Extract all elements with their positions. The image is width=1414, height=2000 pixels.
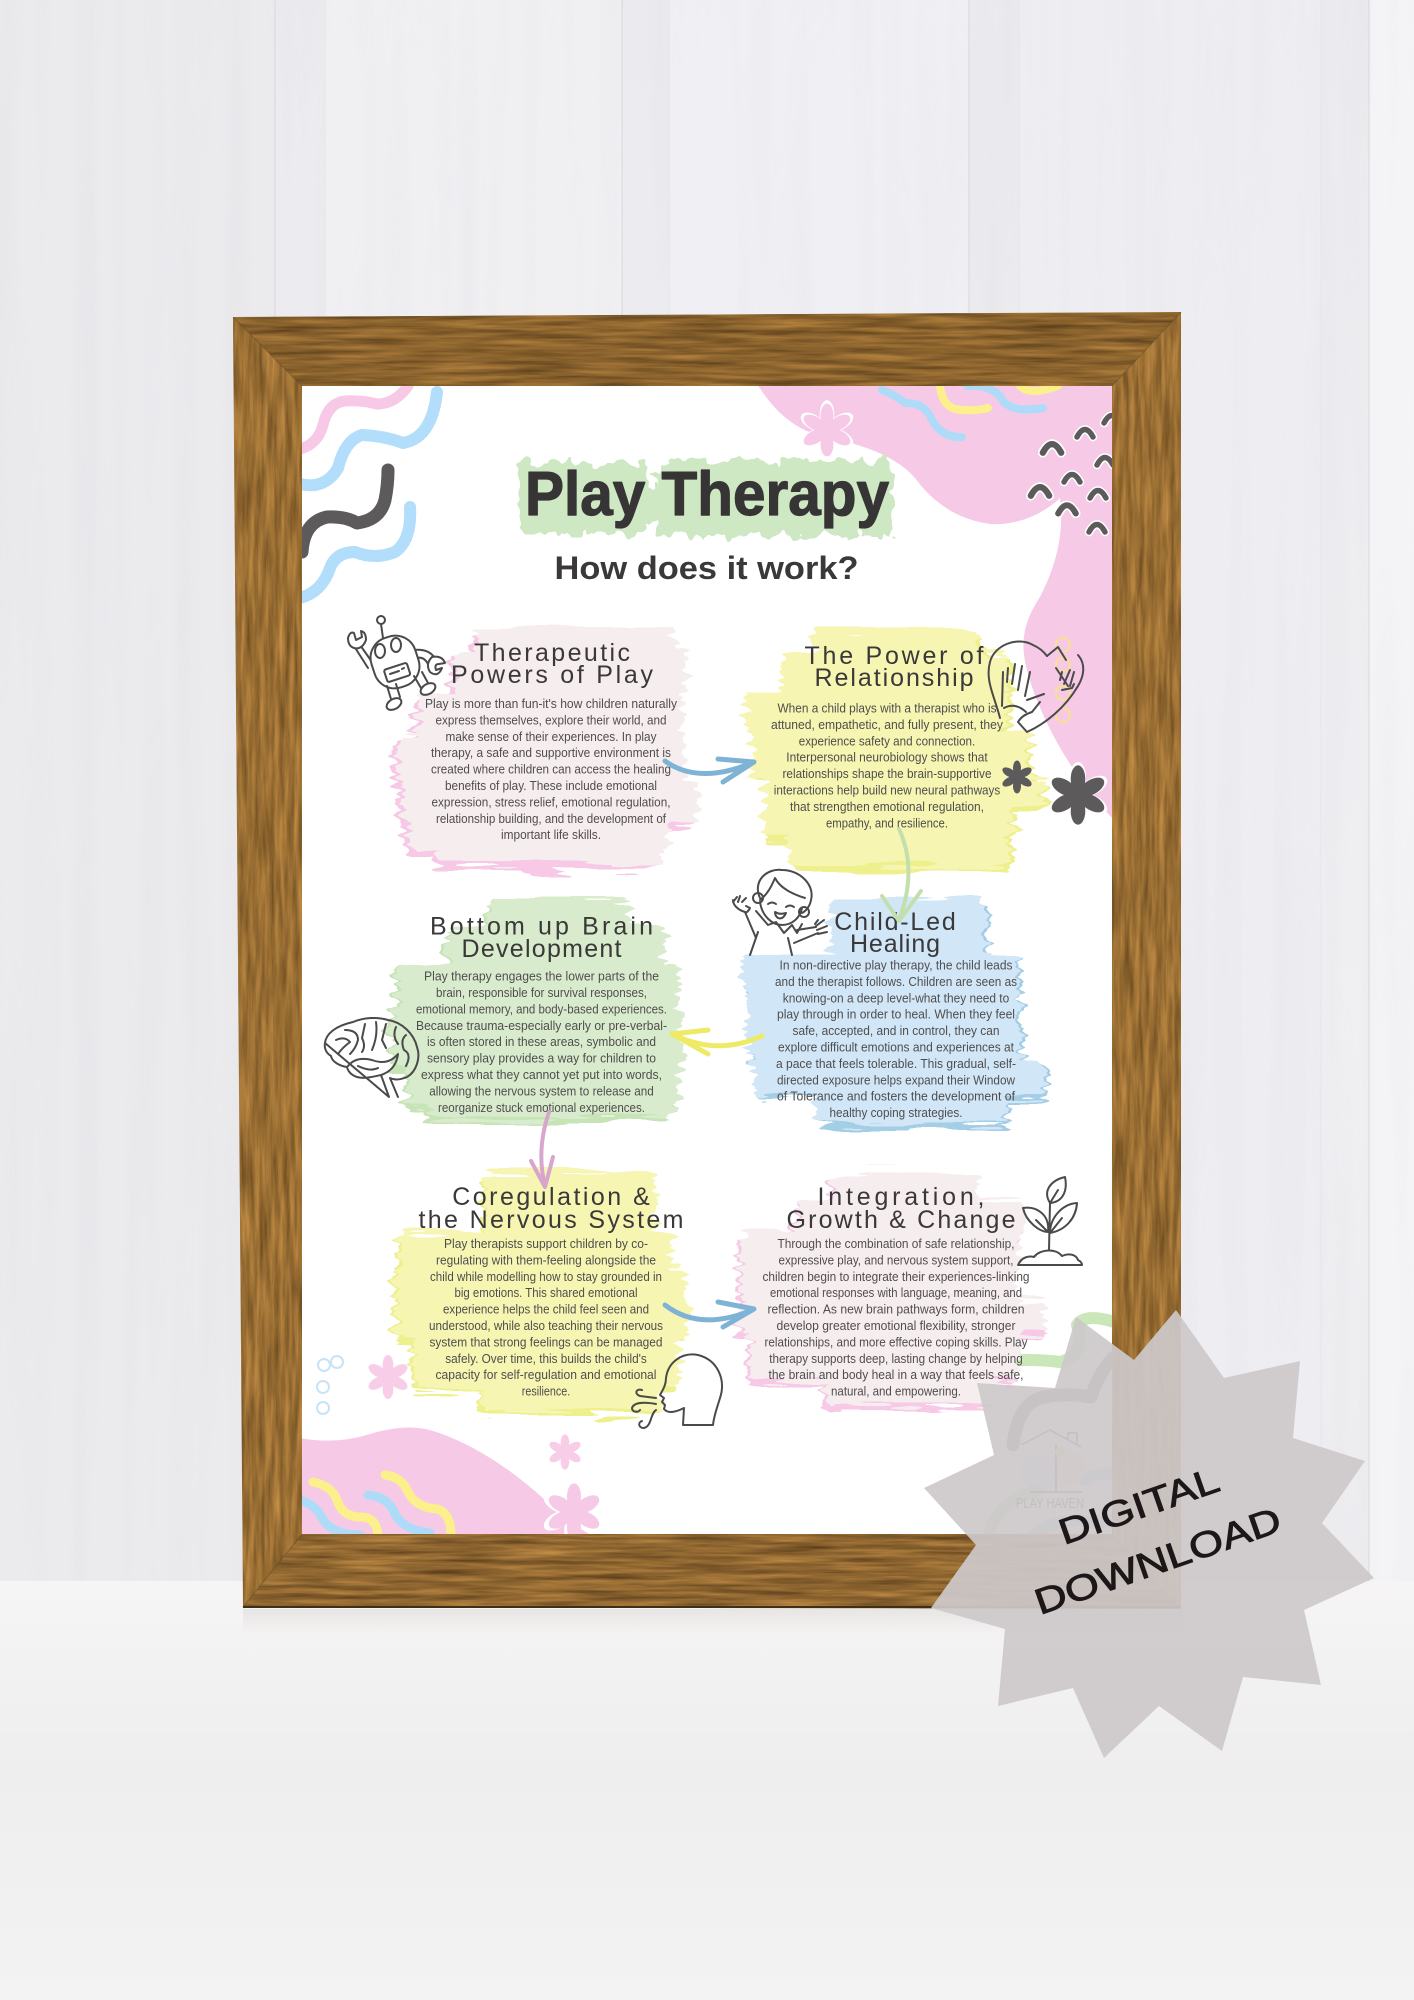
- body text: and the therapist follows. Children are seen as: [775, 975, 1017, 989]
- panel: The Power of Relationship: [745, 628, 1111, 872]
- heading: Bottom up Brain: [430, 912, 653, 940]
- icon: robot: [348, 616, 445, 712]
- brush background: yellow: [393, 1172, 686, 1416]
- heading: [786, 1183, 1016, 1234]
- body text: healthy coping strategies.: [830, 1106, 962, 1120]
- panel: Therapeutic Powers of Play: [348, 616, 699, 870]
- body text: expression, stress relief, emotional regulation,: [432, 795, 670, 809]
- heading: Child-Led: [834, 908, 956, 936]
- body text: knowing-on a deep level-what they need to: [783, 991, 1009, 1005]
- body text: express what they cannot yet put into words,: [421, 1068, 662, 1082]
- body text: child while modelling how to stay grounded in: [430, 1270, 662, 1284]
- heading: Coregulation &: [452, 1183, 650, 1211]
- heading: Development: [462, 935, 622, 963]
- body text: therapy, a safe and supportive environment is: [431, 746, 671, 760]
- logo: Play Haven watermark: PLAY HAVEN: [1016, 1495, 1084, 1512]
- body text: [762, 1237, 1030, 1399]
- body text: directed exposure helps expand their Window: [777, 1073, 1016, 1087]
- icon: sprouting plant: [1018, 1177, 1082, 1265]
- panel: Bottom up Brain Development: [325, 899, 684, 1123]
- body text: experience helps the child feel seen and: [443, 1303, 649, 1317]
- body text: reflection. As new brain pathways form, children: [768, 1303, 1024, 1317]
- body text: resilience.: [522, 1385, 570, 1399]
- body text: safely. Over time, this builds the child's: [445, 1352, 647, 1366]
- heading: Healing: [850, 930, 940, 958]
- body text: important life skills.: [501, 828, 601, 842]
- body text: safe, accepted, and in control, they can: [792, 1024, 1000, 1038]
- body text: emotional memory, and body-based experiences.: [416, 1002, 667, 1016]
- body text: Through the combination of safe relationship,: [778, 1237, 1014, 1251]
- body text: understood, while also teaching their nervous: [429, 1319, 663, 1333]
- background: white table surface: [0, 1581, 1414, 2000]
- icon: heart with hands: [989, 638, 1083, 732]
- badge: Digital Download starburst: DOWNLOAD: [1029, 1499, 1286, 1623]
- heading: [418, 1183, 684, 1234]
- arrow: yellow, Child-Led Healing to Bottom up Brain: [672, 1030, 762, 1054]
- chevrons: grey pattern: [1031, 416, 1120, 532]
- arrow: pink, Bottom up Brain to Coregulation: [531, 1112, 553, 1187]
- body text: allowing the nervous system to release and: [429, 1084, 654, 1098]
- brush background: green: [389, 899, 684, 1123]
- body text: empathy, and resilience.: [826, 816, 948, 830]
- body text: natural, and empowering.: [831, 1385, 961, 1399]
- heading: Integration,: [818, 1183, 984, 1211]
- body text: brain, responsible for survival responses,: [436, 986, 647, 1000]
- arrow: blue, Therapeutic Powers to Power of Relationship: [665, 759, 754, 782]
- body text: Because trauma-especially early or pre-verbal-: [416, 1019, 667, 1033]
- squiggles: bottom left blob: [300, 1475, 451, 1538]
- subtitle: How does it work?: How does it work?: [554, 550, 858, 586]
- icon: waving child: [733, 870, 827, 955]
- body text: [771, 702, 1004, 830]
- heading: Growth & Change: [786, 1206, 1016, 1234]
- body text: In non-directive play therapy, the child leads: [780, 958, 1012, 972]
- squiggles: top right blob: [882, 386, 1058, 437]
- body text: [416, 970, 667, 1115]
- squiggles: bottom right under badge: [1006, 1312, 1112, 1452]
- body text: system that strong feelings can be managed: [430, 1335, 662, 1349]
- panel: Integration, Growth and Change: [735, 1172, 1082, 1411]
- body text: express themselves, explore their world, and: [436, 713, 666, 727]
- flowers and rings: bottom left: [317, 1355, 604, 1544]
- brush background: pink: [735, 1172, 1046, 1411]
- heading: [451, 639, 654, 689]
- badge: Digital Download starburst: [924, 1310, 1374, 1758]
- brush background: pink: [393, 628, 699, 870]
- body text: expressive play, and nervous system support,: [778, 1253, 1014, 1267]
- panel: Coregulation and the Nervous System: [393, 1172, 722, 1428]
- poster paper: [302, 386, 1112, 1534]
- wooden picture frame: [233, 312, 1183, 1610]
- badge: Digital Download starburst: DIGITAL: [1053, 1459, 1224, 1553]
- body text: reorganize stuck emotional experiences.: [438, 1101, 645, 1115]
- heading: [804, 642, 984, 692]
- poster decorations: [300, 384, 1120, 1544]
- body text: children begin to integrate their experiences-linking: [762, 1270, 1030, 1284]
- body text: [429, 1237, 663, 1399]
- body text: a pace that feels tolerable. This gradual, self-: [776, 1057, 1016, 1071]
- body text: relationship building, and the development of: [436, 812, 666, 826]
- body text: attuned, empathetic, and fully present, they: [771, 718, 1004, 732]
- body text: Interpersonal neurobiology shows that: [786, 751, 988, 765]
- icon: brain: [325, 1018, 418, 1097]
- heading: Powers of Play: [451, 661, 654, 689]
- body text: therapy supports deep, lasting change by helping: [769, 1352, 1023, 1366]
- body text: Play therapists support children by co-: [444, 1237, 648, 1251]
- body text: benefits of play. These include emotional: [445, 779, 657, 793]
- body text: sensory play provides a way for children to: [427, 1052, 656, 1066]
- body text: that strengthen emotional regulation,: [790, 800, 984, 814]
- icon: head breathing out: [632, 1354, 722, 1428]
- body text: emotional responses with language, meaning, and: [770, 1286, 1022, 1300]
- body text: of Tolerance and fosters the development of: [777, 1090, 1015, 1104]
- title: Play Therapy on torn green patch: Play Therapy: [525, 460, 889, 529]
- icons: grey asterisks: [1001, 760, 1111, 828]
- body text: explore difficult emotions and experiences at: [778, 1040, 1014, 1054]
- body text: make sense of their experiences. In play: [446, 730, 657, 744]
- body text: interactions help build new neural pathways: [774, 784, 1000, 798]
- background: white wood plank wall: [0, 0, 1414, 1582]
- pink blob: top right: [757, 384, 1114, 820]
- heading: The Power of: [804, 642, 984, 670]
- heading: [430, 912, 653, 963]
- heading: Therapeutic: [474, 639, 630, 667]
- body text: relationships, and more effective coping skills. Play: [764, 1335, 1028, 1349]
- panel: Child-Led Healing: [733, 870, 1048, 1128]
- body text: Play is more than fun-it's how children naturally: [425, 697, 678, 711]
- logo: Play Haven watermark: [1016, 1430, 1086, 1512]
- body text: Play therapy engages the lower parts of the: [424, 970, 659, 984]
- arrow: blue, Coregulation to Integration: [665, 1302, 754, 1327]
- heading: [834, 908, 956, 958]
- body text: develop greater emotional flexibility, stronger: [776, 1319, 1016, 1333]
- brush background: yellow: [745, 628, 1049, 872]
- brush background: blue: [742, 899, 1048, 1128]
- body text: play through in order to heal. When they feel: [777, 1008, 1015, 1022]
- body text: the brain and body heal in a way that feels safe,: [768, 1368, 1024, 1382]
- body text: relationships shape the brain-supportive: [782, 767, 992, 781]
- arrow: green, Power of Relationship to Child-Led Healing: [882, 829, 921, 921]
- body text: capacity for self-regulation and emotional: [436, 1368, 656, 1382]
- heading: Relationship: [814, 664, 974, 692]
- flower: top blob edge: [800, 400, 854, 456]
- body text: When a child plays with a therapist who is: [778, 702, 996, 716]
- body text: is often stored in these areas, symbolic and: [427, 1035, 656, 1049]
- body text: regulating with them-feeling alongside the: [436, 1253, 656, 1267]
- body text: experience safety and connection.: [799, 734, 975, 748]
- body text: created where children can access the healing: [431, 763, 671, 777]
- body text: [425, 697, 678, 842]
- pink blob: bottom left: [300, 1427, 592, 1536]
- body text: big emotions. This shared emotional: [454, 1286, 638, 1300]
- body text: [775, 958, 1017, 1120]
- squiggles: top left: [300, 386, 437, 598]
- heading: the Nervous System: [418, 1206, 684, 1234]
